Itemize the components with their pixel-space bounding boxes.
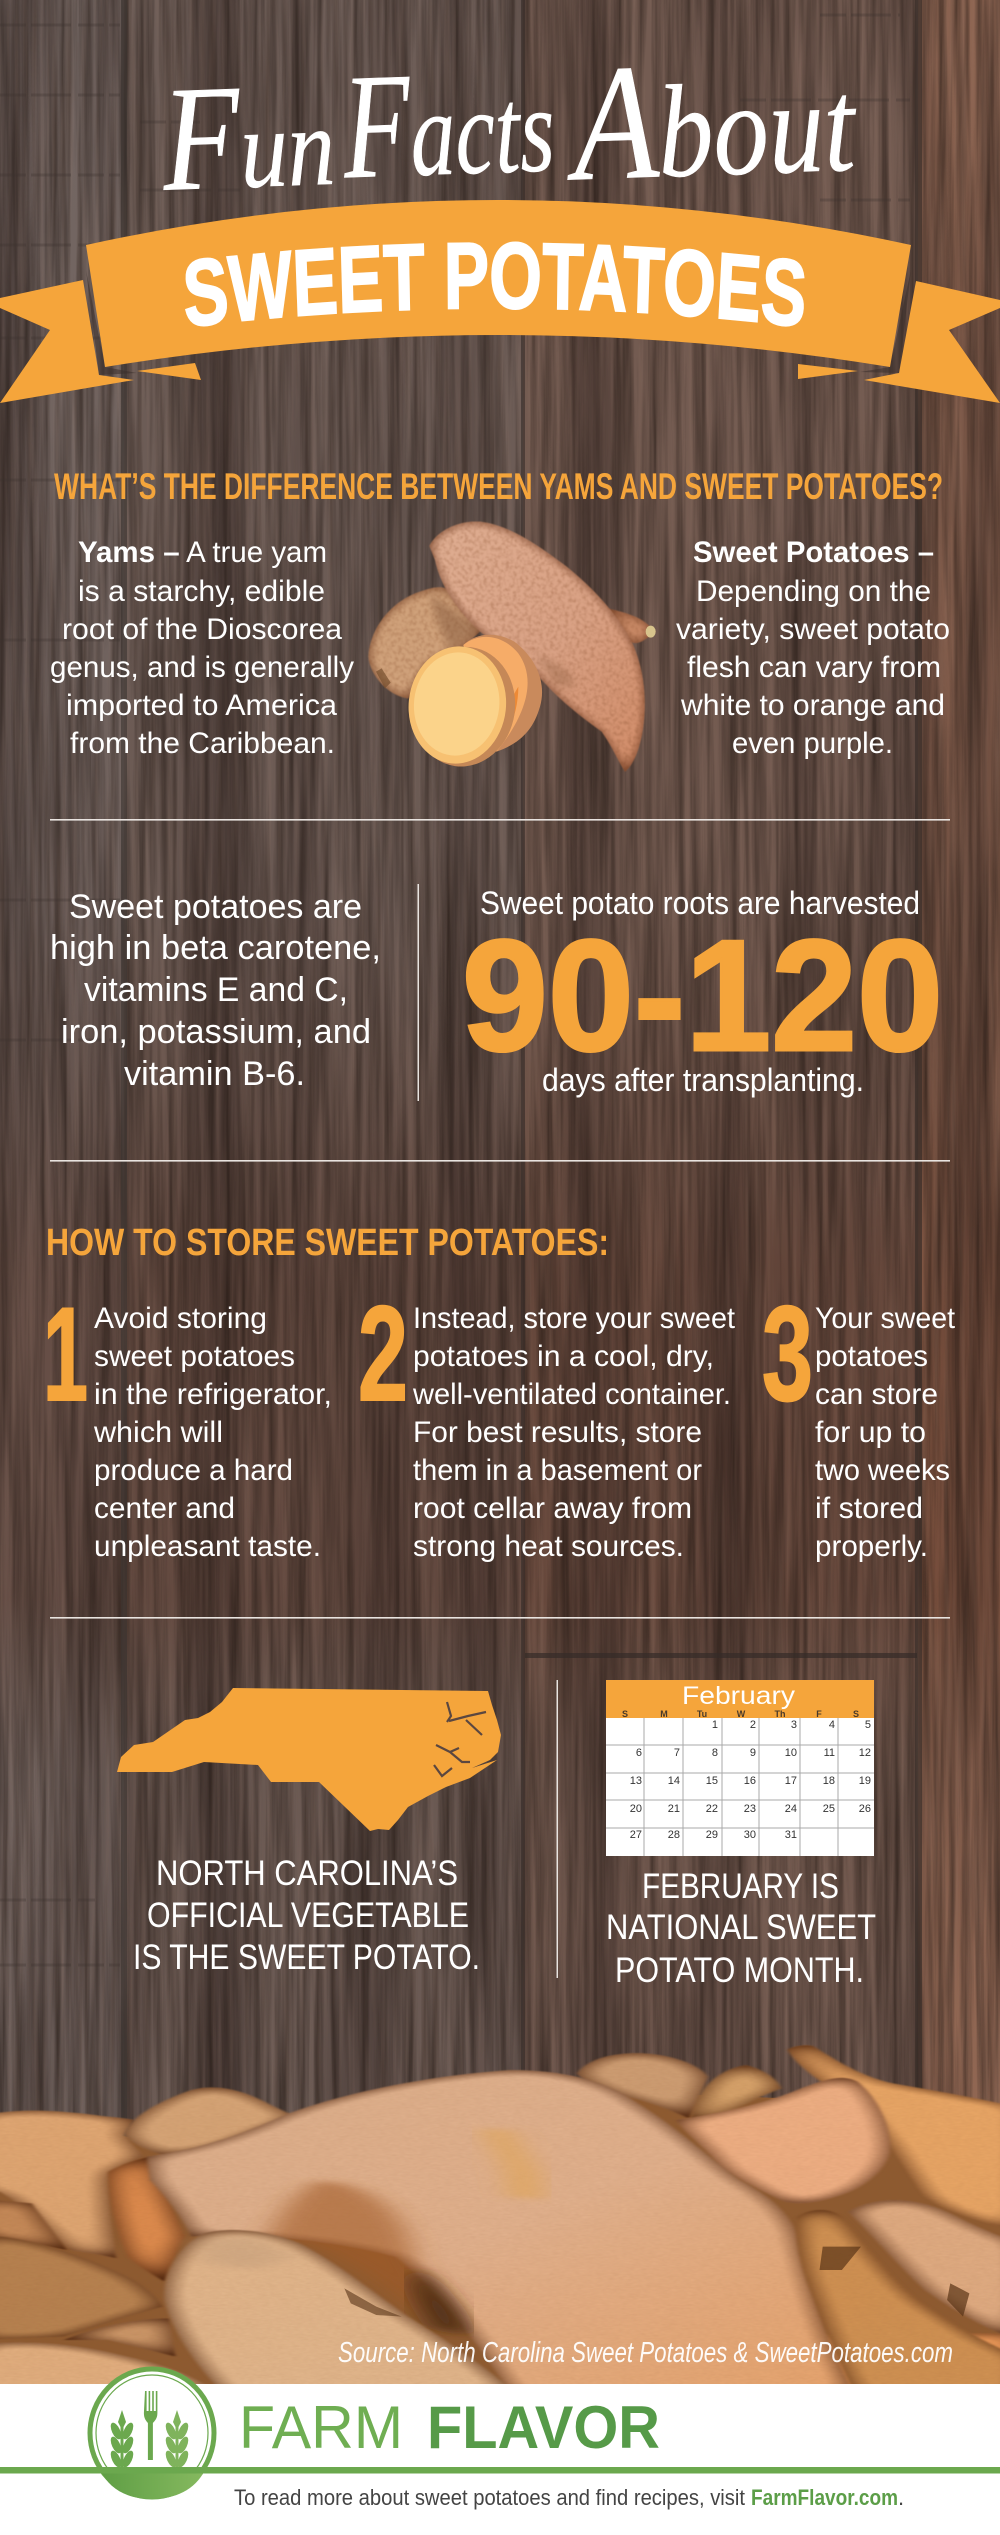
photo: shadow base [0,2090,1000,2387]
photo: right foreground potatoes [753,2200,1000,2393]
calendar: February [606,1680,874,1856]
stat: harvest days [462,885,943,1098]
step 1: center and [94,1492,235,1525]
calendar: February: 27 [630,1829,642,1841]
calendar: February: 17 [785,1775,797,1787]
text block: yams: root of the Dioscorea [62,613,342,646]
text block: nutrients: Sweet potatoes are [69,888,362,926]
logo wordmark: Farm Flavor [239,2394,660,2461]
text block: nutrients: vitamins E and C, [84,971,348,1009]
text block: sweet potatoes: Sweet Potatoes – [693,536,934,569]
title: Fun Facts About: Facts [339,37,557,210]
caption: February: NATIONAL SWEET [606,1908,876,1947]
footer panel [0,2384,1000,2535]
map: coastal sounds [434,1702,486,1776]
calendar: February: S [622,1709,628,1719]
emblem ring [90,2369,214,2497]
icon: sweet potatoes with cut slices [368,521,656,773]
emblem bowl [100,2470,205,2499]
calendar: February: 19 [859,1775,871,1787]
step 1 [43,1281,332,1563]
footer call to action: FarmFlavor.com [751,2485,898,2510]
step 2: For best results, store [413,1416,702,1449]
text block: yams: Yams – A true yam [78,536,327,569]
text block: sweet potatoes: flesh can vary from [687,651,941,684]
text block: sweet potatoes [676,536,950,760]
ribbon right tail [864,281,1000,403]
calendar: February: 20 [630,1803,642,1815]
step 1: which will [93,1416,223,1449]
banner heading: SWEET POTATOES: SWEET POTATOES [185,242,804,327]
big number 90-120: 90-120 [462,908,943,1084]
long potato [429,521,645,772]
step 2: root cellar away from [413,1492,692,1525]
step 2: potatoes in a cool, dry, [413,1340,714,1373]
text block: yams: genus, and is generally [50,651,354,684]
calendar: February: 25 [823,1803,835,1815]
calendar: February: 1 [712,1719,718,1731]
icon: wheat right [164,2410,190,2469]
icon: wheat left [109,2410,135,2469]
calendar: February: 3 [791,1719,797,1731]
caption: North Carolina: IS THE SWEET POTATO. [133,1938,480,1977]
calendar: February: 21 [668,1803,680,1815]
step 3 [762,1278,956,1563]
calendar header [606,1680,874,1718]
footer call to action: . [898,2485,904,2510]
calendar: February: 4 [829,1719,835,1731]
title: Fun Facts About [158,23,860,230]
text block: yams: is a starchy, edible [78,575,325,608]
calendar: February: 11 [824,1747,835,1759]
map: North Carolina [117,1688,501,1831]
icon: fork [144,2391,157,2460]
calendar: February: 2 [750,1719,756,1731]
step 2 [358,1278,736,1563]
step 2: Instead, store your sweet [413,1302,736,1335]
text block: nutrients: iron, potassium, and [61,1013,371,1051]
calendar: February: 14 [668,1775,680,1787]
calendar: February: 9 [750,1747,756,1759]
text block: sweet potatoes: Depending on the [696,575,931,608]
number 1: 1 [43,1281,88,1429]
back slice [463,635,542,752]
caption: February: POTATO MONTH. [615,1951,864,1990]
number 3: 3 [762,1278,813,1429]
calendar: February: 12 [859,1747,871,1759]
photo: large centre potato [147,2070,855,2393]
text block: nutrients: vitamin B-6. [124,1055,305,1093]
calendar: February: 28 [668,1829,680,1841]
ribbon left tail [0,280,134,403]
caption: North Carolina: OFFICIAL VEGETABLE [147,1896,469,1935]
text block: yams: from the Caribbean. [70,727,335,760]
step 1: sweet potatoes [94,1340,295,1373]
title: Fun Facts About: Fun [159,51,337,223]
calendar: February: 7 [674,1747,680,1759]
calendar: February: 5 [865,1719,871,1731]
calendar: February: Th [774,1709,786,1719]
footer call to action: To read more about sweet potatoes and find recipes, visit [234,2485,745,2510]
calendar: February: W [737,1709,746,1719]
calendar: February: 24 [785,1803,797,1815]
text block: nutrients: high in beta carotene, [50,929,381,967]
step 3: properly. [815,1530,928,1563]
step 3: for up to [815,1416,926,1449]
step 2: them in a basement or [413,1454,702,1487]
photo: rear right potatoes [577,2045,1000,2233]
text block: sweet potatoes: variety, sweet potato [676,613,950,646]
step 3: two weeks [815,1454,950,1487]
step 1: produce a hard [94,1454,293,1487]
calendar: February: 30 [744,1829,756,1841]
caption: North Carolina [133,1854,480,1977]
calendar: February: 29 [706,1829,718,1841]
calendar: February: 22 [706,1803,718,1815]
caption: North Carolina: NORTH CAROLINA’S [156,1854,458,1893]
step 3: if stored [815,1492,923,1525]
step 2: well-ventilated container. [412,1378,731,1411]
calendar: February: 15 [706,1775,718,1787]
step 1: unpleasant taste. [94,1530,321,1563]
logo wordmark: Farm Flavor: FARM [239,2394,403,2461]
text block: yams: imported to America [66,689,337,722]
calendar: February: 23 [744,1803,756,1815]
stat: harvest days: Sweet potato roots are harvested [480,885,920,921]
calendar: February: 18 [823,1775,835,1787]
text block: nutrients [50,888,381,1093]
photo: left potatoes [0,2087,300,2393]
photo: long right potato [796,2210,1000,2393]
step 3: Your sweet [815,1302,956,1335]
rear round potato [368,587,482,698]
calendar: February: S [853,1709,859,1719]
calendar: February: M [660,1709,668,1719]
step 1: in the refrigerator, [94,1378,332,1411]
front slice [404,640,523,773]
logo wordmark: Farm Flavor: FLAVOR [427,2394,660,2461]
step 2: strong heat sources. [413,1530,684,1563]
caption: February: FEBRUARY IS [642,1867,839,1906]
calendar: February: Tu [697,1709,707,1719]
calendar: February: 16 [744,1775,756,1787]
stat: harvest days: days after transplanting. [542,1062,864,1098]
orange ribbon banner [0,200,1000,403]
title: Fun Facts About: About [562,23,860,216]
calendar: February: 10 [785,1747,797,1759]
text block: yams [50,536,354,760]
step 3: can store [815,1378,938,1411]
heading: how to store: HOW TO STORE SWEET POTATOES: [46,1222,609,1264]
calendar: February: F [816,1709,822,1719]
calendar: February: 26 [859,1803,871,1815]
photo: pile of sweet potatoes [0,2045,1000,2393]
caption: February [606,1867,876,1990]
calendar: February: 13 [630,1775,642,1787]
number 2: 2 [358,1278,408,1429]
potato stem end [607,608,656,643]
step 3: potatoes [815,1340,928,1373]
calendar: February: 6 [636,1747,642,1759]
text block: sweet potatoes: even purple. [732,727,893,760]
photo: front potato [164,2230,517,2393]
step 1: Avoid storing [94,1302,267,1335]
logo: Farm Flavor emblem [90,2369,214,2499]
calendar body [606,1718,874,1856]
text block: sweet potatoes: white to orange and [680,689,945,722]
calendar: February: February [682,1682,796,1710]
calendar: February: 8 [712,1747,718,1759]
ribbon main band [86,200,911,367]
calendar: February: 31 [785,1829,797,1841]
